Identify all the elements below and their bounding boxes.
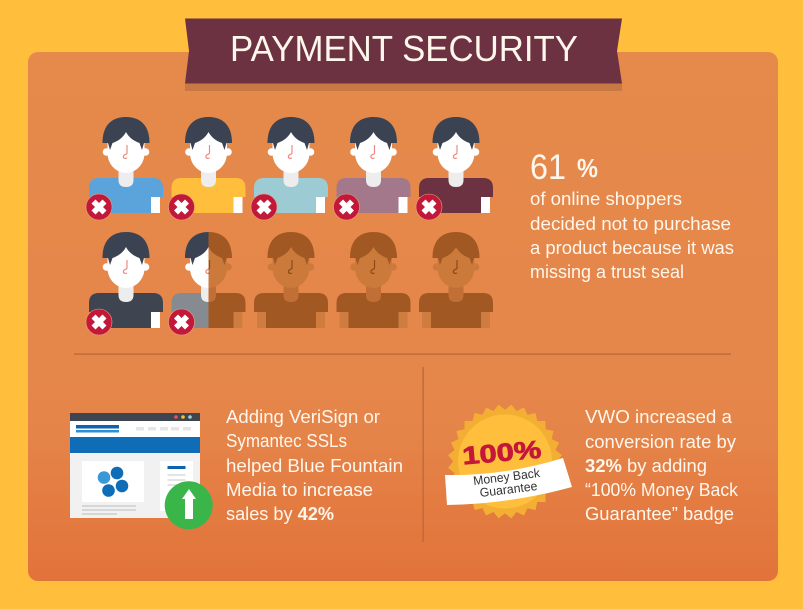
icon: money back guarantee badge xyxy=(445,405,572,518)
icon: money back guarantee badge: 100% xyxy=(461,436,542,470)
starburst xyxy=(448,405,562,518)
text: VeriSign and Symantec SSLs: Symantec SSLs xyxy=(226,431,347,451)
text: trust seal description: a product because it was xyxy=(530,238,734,258)
statistic: 61%: % xyxy=(577,153,598,183)
text: trust seal description xyxy=(530,189,734,282)
icon: money back guarantee badge: Guarantee xyxy=(479,479,538,500)
text: VWO conversion rate xyxy=(585,407,739,524)
statistic: 61% xyxy=(530,148,598,187)
text: trust seal description: missing a trust seal xyxy=(530,262,684,282)
title banner xyxy=(185,18,622,91)
text: VWO conversion rate: “100% Money Back xyxy=(585,480,739,500)
text: VWO conversion rate: 32% by adding xyxy=(585,456,707,476)
text: VWO conversion rate: VWO increased a xyxy=(585,407,733,427)
text: VeriSign and Symantec SSLs xyxy=(226,407,403,524)
person icons: row 1 xyxy=(86,117,493,220)
text: trust seal description: of online shoppers xyxy=(530,189,682,209)
icon: money back guarantee badge: Money Back xyxy=(472,466,541,488)
text: VWO conversion rate: Guarantee” badge xyxy=(585,504,734,524)
title banner: PAYMENT SECURITY xyxy=(230,28,578,69)
text: trust seal description: decided not to purchase xyxy=(530,214,731,234)
text: VeriSign and Symantec SSLs: sales by 42% xyxy=(226,504,334,524)
statistic: 61%: 61 xyxy=(530,148,566,187)
text: VeriSign and Symantec SSLs: Media to increase xyxy=(226,480,373,500)
text: VWO conversion rate: conversion rate by xyxy=(585,432,736,452)
person icons: row 2 xyxy=(86,232,493,335)
text: VeriSign and Symantec SSLs: helped Blue Fountain xyxy=(226,456,403,476)
text: VeriSign and Symantec SSLs: Adding VeriSign or xyxy=(226,407,380,427)
icon: website browser with up arrow xyxy=(70,413,213,529)
